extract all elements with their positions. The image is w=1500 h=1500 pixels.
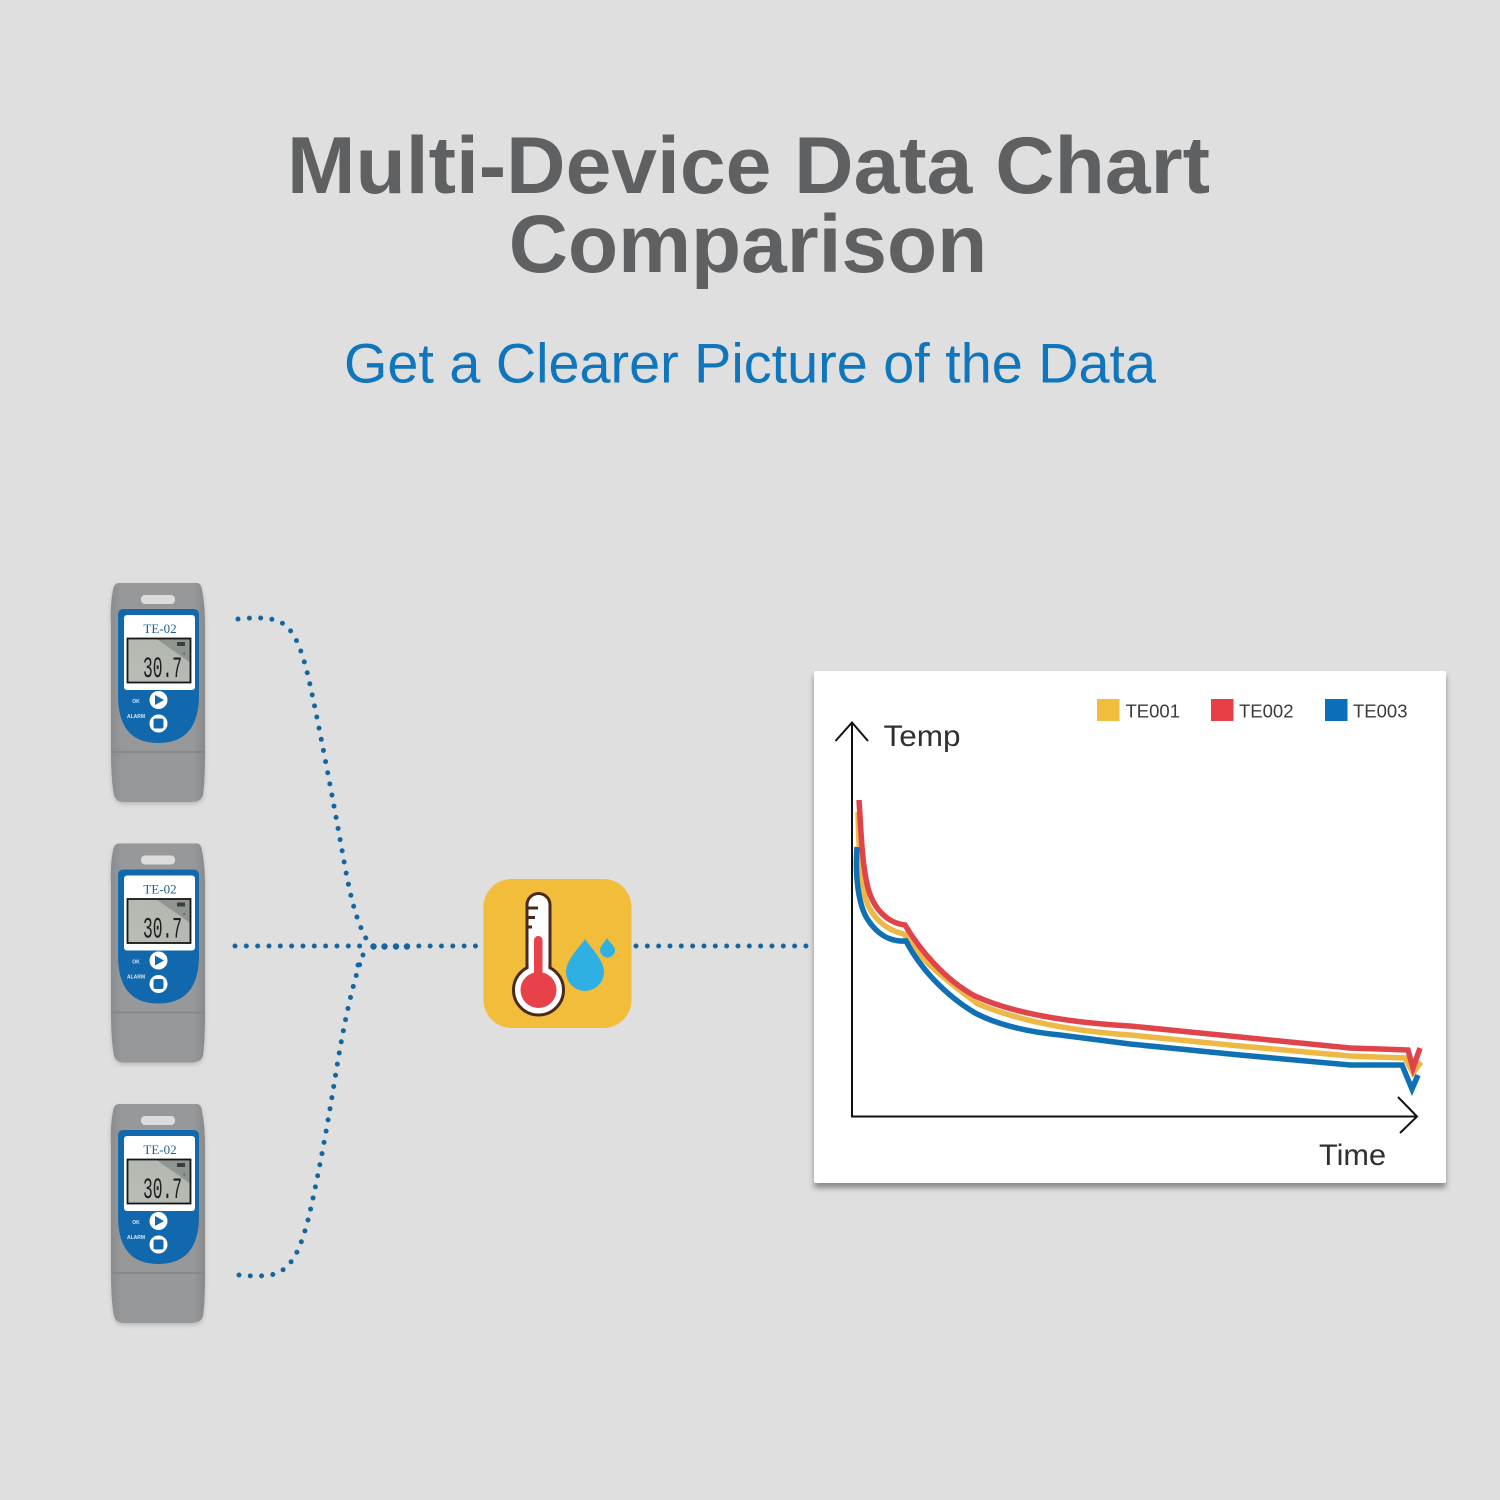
series: TE002 red [859,800,1420,1068]
device 2: ALARM [127,974,145,980]
legend [1097,699,1408,722]
device 3: 30.7 [143,1174,182,1208]
device 1: TE-02 [143,621,177,636]
axis label: temp: Temp [884,720,960,753]
device 2 [111,844,205,1062]
title: Multi-Device Data Chart [287,121,1210,211]
device 3: ° [183,1174,186,1180]
device 2: 30.7 [143,914,182,948]
thermometer [527,894,550,985]
chart axes [836,722,1417,1133]
axis label: time: Time [1319,1139,1386,1172]
series: TE001 yellow [858,812,1421,1073]
device 3: ALARM [127,1235,145,1241]
dotted connectors [235,618,807,1276]
small water drop [600,938,615,958]
title second line: Comparison [509,199,987,290]
device 1: ° [183,653,186,659]
device 1: ALARM [127,714,145,720]
device 2: ° [183,914,186,920]
device 2: TE-02 [143,882,177,896]
device 1 [111,583,205,802]
device 1: 30.7 [143,653,182,687]
big water drop [566,939,604,991]
legend: TE003 [1353,700,1408,722]
subtitle: Get a Clearer Picture of the Data [344,332,1157,394]
legend: TE001 [1126,700,1180,722]
device 2: OK [132,960,140,966]
series: TE003 blue [856,847,1418,1089]
legend: TE002 [1239,700,1294,722]
device 1: OK [132,699,140,705]
icon: thermometer and water drops [484,879,632,1028]
device 3: TE-02 [143,1142,177,1157]
device 3: OK [132,1220,140,1226]
panel: chart card [814,671,1446,1183]
device 3 [111,1104,205,1323]
